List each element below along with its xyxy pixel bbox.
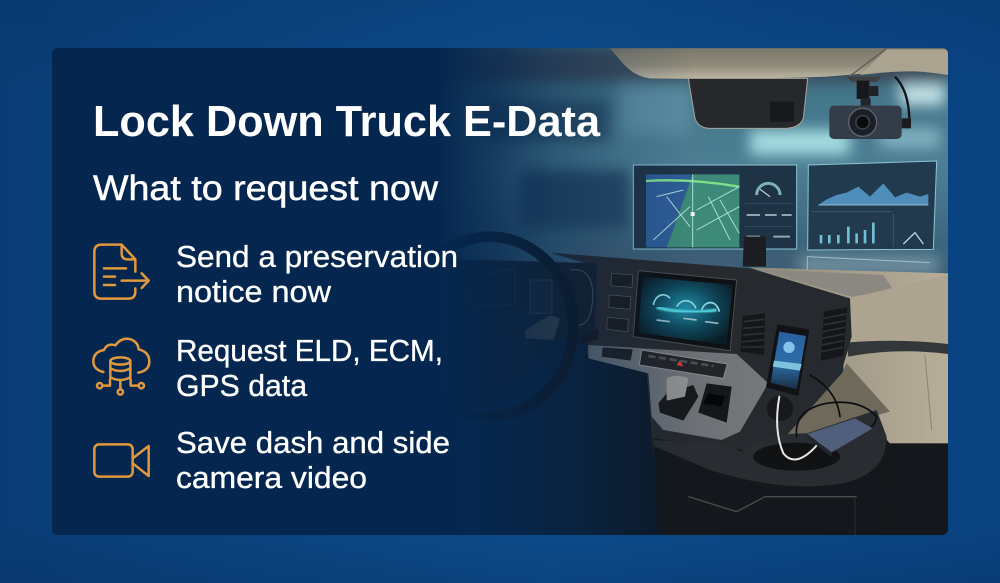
item: save video: camera video [176,460,367,495]
item: request data: GPS data [176,368,308,403]
panel: truck cab photo with dark overlay [52,48,950,537]
item: save video [94,425,450,495]
item: request data: Request ELD, ECM, [176,333,443,368]
dash camera [829,77,911,139]
right vent [821,307,847,361]
steering wheel [456,232,598,422]
beige passenger dash [750,267,948,450]
rear-view mirror [688,78,808,128]
central dark dash [550,253,852,453]
icon: document with arrow [94,245,149,299]
headliner [610,48,948,139]
icon: video camera [94,444,149,477]
analytics screen [808,161,937,250]
item: preservation notice: notice now [176,274,332,309]
windshield view [458,48,948,275]
item: save video: Save dash and side [176,425,450,460]
dark navy fade overlay [52,48,678,535]
grey trim plate [588,345,768,440]
cables [777,375,877,460]
mount base [743,237,766,267]
side button columns [607,273,633,332]
icon: cloud database [93,339,149,395]
holographic data screens [633,161,937,270]
switch panels [602,347,727,378]
map screen [633,165,797,249]
item: preservation notice [94,239,458,309]
subtitle: What to request now [93,169,439,208]
left vent [741,313,765,355]
gear selector [658,376,732,423]
dashboard and console [405,237,950,537]
instrument cluster [492,268,594,326]
cup holders [753,396,840,471]
lower console and tray [653,430,888,535]
center screen [633,271,737,351]
shadowed beige under right vent [788,364,890,434]
item: request data [93,333,443,403]
steering column dark area [530,340,658,535]
power bank [807,418,873,457]
smartphone [766,324,809,396]
title: Lock Down Truck E-Data [93,97,601,146]
item: preservation notice: Send a preservation [176,239,458,274]
